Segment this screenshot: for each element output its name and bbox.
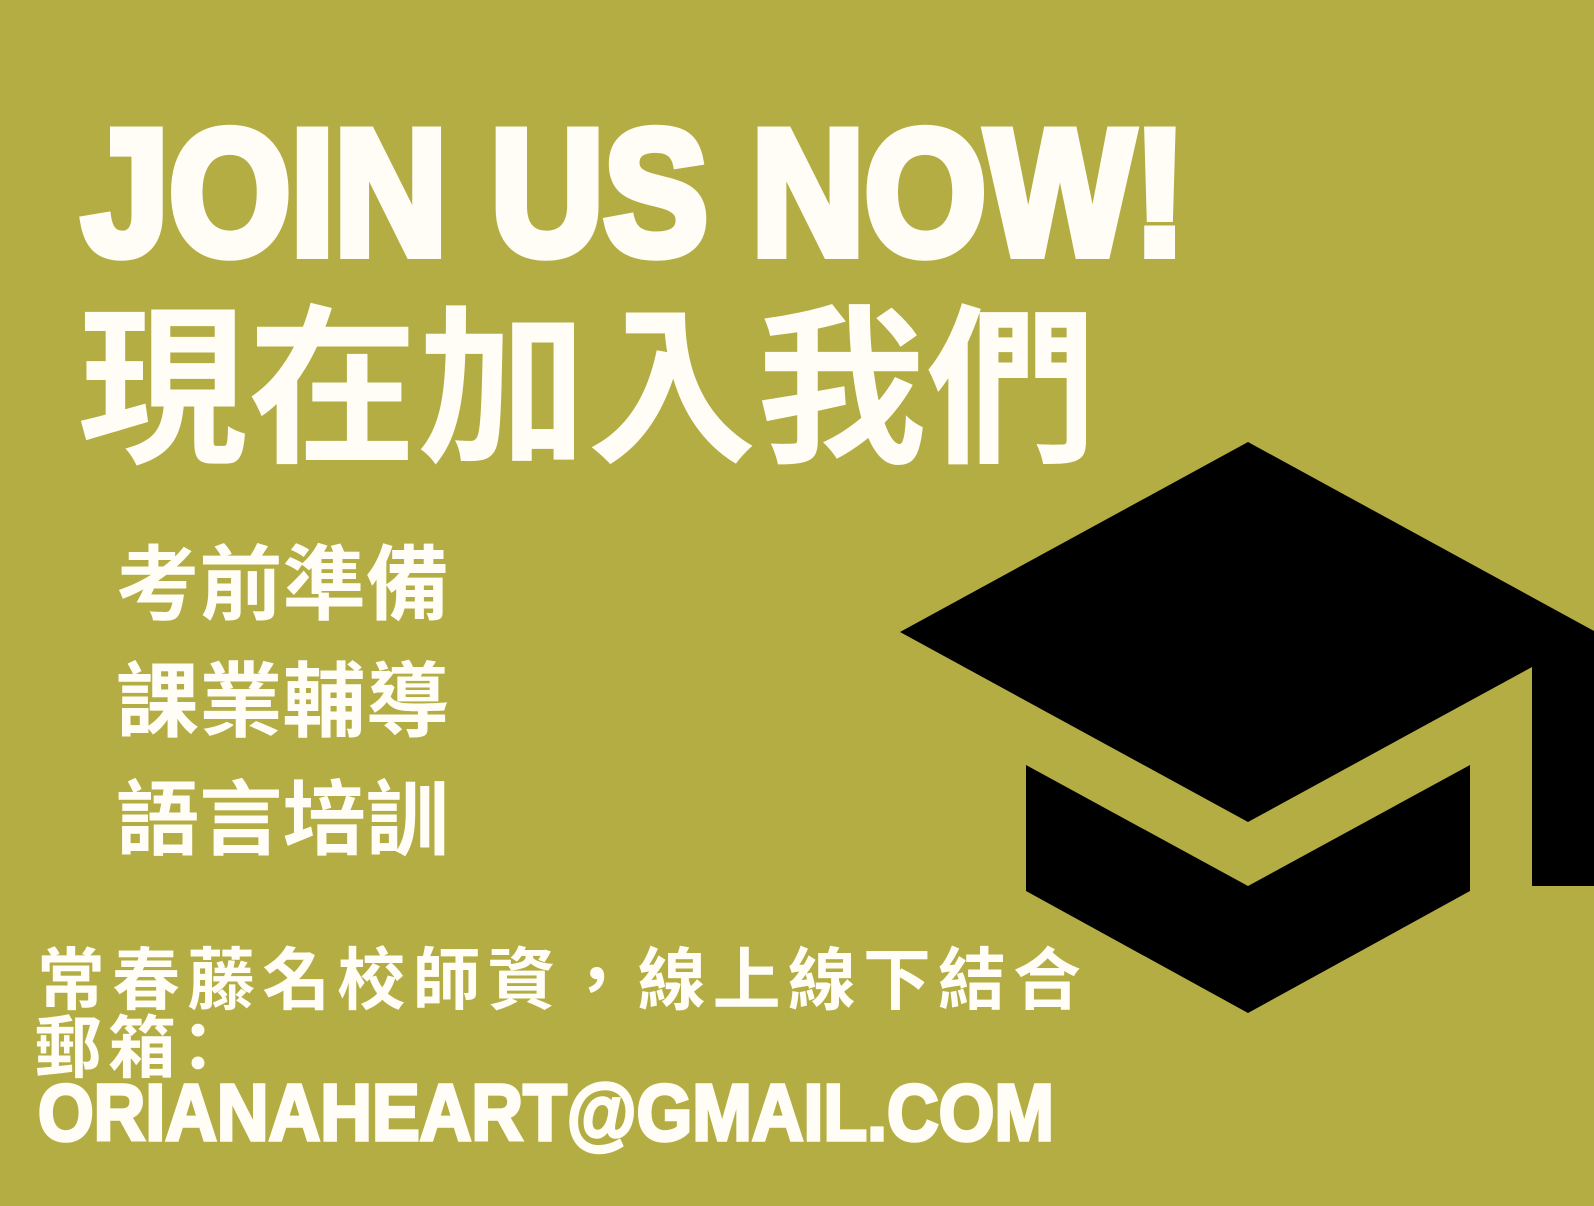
email label: 郵箱： xyxy=(34,1011,238,1087)
service: exam preparation: 考前準備 xyxy=(116,540,449,631)
email address: ORIANAHEART@GMAIL.COM xyxy=(38,1068,1054,1157)
service list xyxy=(116,540,449,866)
icon: graduation cap xyxy=(900,442,1594,1013)
service: language training: 語言培訓 xyxy=(116,775,449,866)
service: academic tutoring: 課業輔導 xyxy=(116,657,449,748)
teachers tagline: 常春藤名校師資，線上線下結合 xyxy=(37,943,1081,1019)
title: JOIN US NOW: JOIN US NOW! xyxy=(82,93,1186,292)
cap base xyxy=(1026,765,1470,1013)
cap board with tassel xyxy=(900,442,1594,886)
title: Chinese heading: 現在加入我們 xyxy=(78,294,1096,486)
contact block xyxy=(34,943,1081,1157)
